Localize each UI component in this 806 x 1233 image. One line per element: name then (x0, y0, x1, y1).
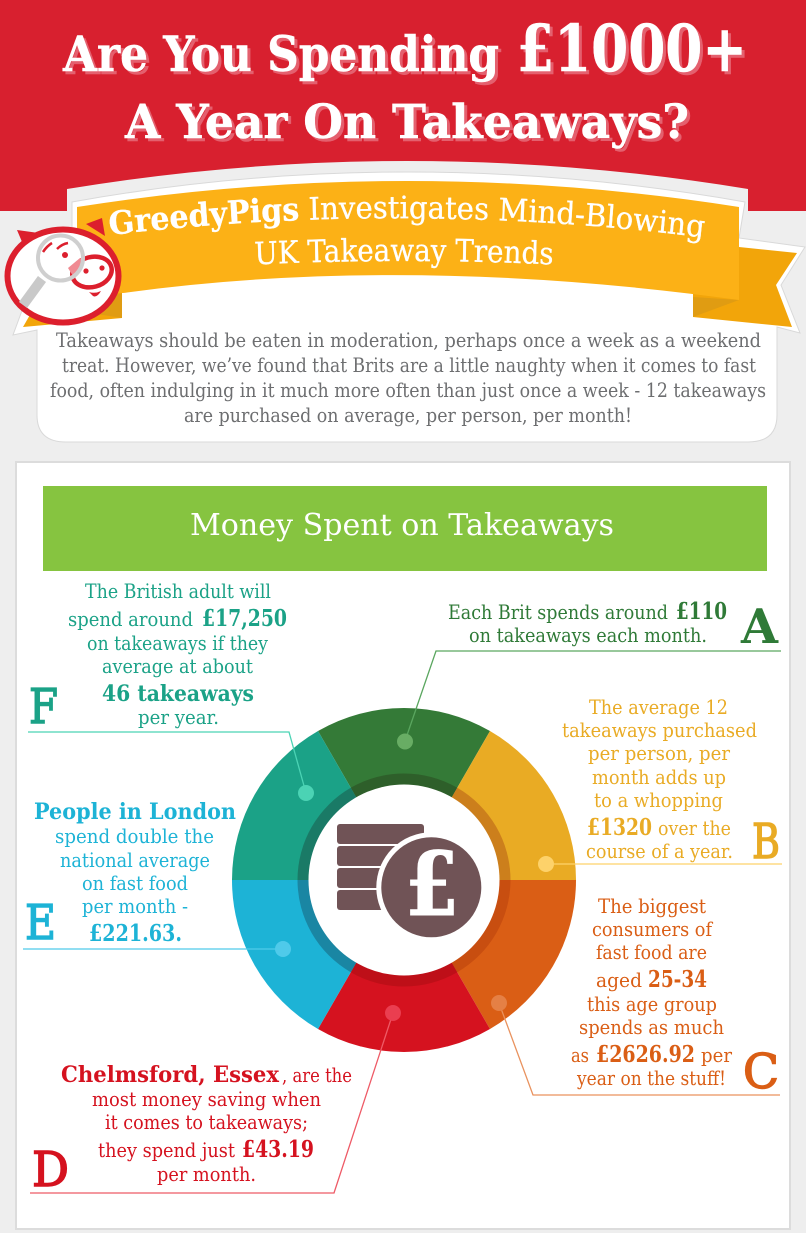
callout B: The average 12 (589, 696, 728, 719)
callout F: The British adult will (85, 580, 271, 603)
pig smile (89, 291, 101, 296)
callout A (397, 598, 781, 750)
callout F: 46 takeaways (102, 681, 254, 707)
panel: money spent (16, 462, 790, 1229)
callout B: to a whopping (594, 789, 723, 812)
callout C: £2626.92 (596, 1041, 695, 1068)
ribbon main (77, 181, 739, 300)
callout C: spends as much (579, 1016, 724, 1039)
callout B: over the (658, 817, 731, 840)
callout E: £221.63. (89, 920, 182, 947)
pig eyes (62, 252, 68, 258)
callout D: most money saving when (92, 1088, 321, 1111)
donut chart (232, 708, 576, 1052)
callout F: per year. (138, 706, 219, 729)
intro text: are purchased on average, per person, per month! (184, 404, 632, 427)
callout B: month adds up (592, 766, 726, 789)
callout B: per person, per (588, 742, 731, 765)
callout F (28, 580, 314, 801)
icon: pig logo with magnifier (8, 218, 118, 322)
callout C: year on the stuff! (576, 1067, 726, 1090)
ribbon white outline (13, 172, 805, 442)
callout C: 25-34 (648, 966, 707, 993)
callout E (23, 799, 291, 957)
callout B: course of a year. (586, 840, 733, 863)
callout C: The biggest (598, 895, 706, 918)
pig face (8, 230, 118, 322)
callout C (491, 895, 780, 1100)
ribbon heading: GreedyPigs Investigates Mind-Blowing (110, 195, 705, 244)
callout B: B (752, 814, 780, 870)
callout D: D (32, 1142, 69, 1198)
callout B (538, 696, 782, 872)
callout C: per (701, 1044, 733, 1067)
callout C: this age group (587, 993, 717, 1016)
callout C: as (571, 1044, 589, 1067)
icon: coins and pound: £ (405, 832, 459, 936)
callout F: £17,250 (202, 605, 287, 632)
title (62, 11, 747, 150)
callout E: People in London (34, 799, 236, 825)
ribbon heading: UK Takeaway Trends (255, 238, 552, 268)
pig snout (69, 252, 115, 292)
callout B: takeaways purchased (562, 719, 757, 742)
section heading (43, 486, 767, 571)
callout E: per month - (82, 895, 188, 918)
callout C: fast food are (596, 941, 707, 964)
callout F: on takeaways if they (87, 632, 268, 655)
pig ears (86, 218, 105, 236)
callout E: spend double the (55, 825, 214, 848)
title: Are You Spending (62, 25, 499, 83)
title: A Year On Takeaways? (124, 95, 689, 150)
callout D: , are the (282, 1064, 352, 1087)
callout E: E (25, 895, 56, 951)
callout E: national average (60, 849, 210, 872)
callout C: aged (596, 969, 642, 992)
callout D: per month. (157, 1163, 256, 1186)
ribbon heading (110, 195, 705, 268)
section heading: Money Spent on Takeaways (190, 508, 614, 543)
callout C: C (743, 1044, 779, 1100)
callout E: on fast food (82, 872, 188, 895)
icon: coins and pound (337, 824, 486, 942)
callout D: it comes to takeaways; (105, 1111, 308, 1134)
callout A: A (740, 599, 779, 655)
callout D: £43.19 (242, 1136, 314, 1163)
callout F: spend around (68, 608, 193, 631)
callout A: £110 (676, 598, 727, 625)
callout D: they spend just (98, 1139, 235, 1162)
callout F: average at about (102, 655, 253, 678)
callout C: consumers of (592, 918, 714, 941)
callout F: F (29, 679, 58, 735)
callout D (30, 1005, 401, 1198)
banner: ribbon (12, 172, 806, 442)
magnifier (23, 279, 42, 305)
callout D: Chelmsford, Essex (61, 1062, 280, 1088)
callout A: Each Brit spends around (448, 601, 668, 624)
title: £1000+ (517, 11, 747, 87)
header band (0, 0, 806, 211)
ribbon left tail (23, 270, 122, 327)
intro text (50, 329, 766, 427)
callout A: on takeaways each month. (469, 624, 707, 647)
callout B: £1320 (587, 814, 652, 841)
ribbon right tail (693, 247, 797, 327)
